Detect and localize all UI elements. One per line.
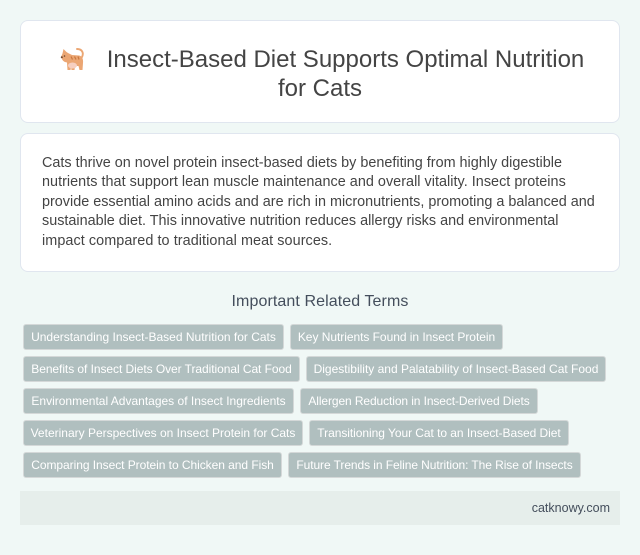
- title text: Insect-Based Diet Supports Optimal Nutrition: [107, 46, 584, 73]
- tag list: [23, 324, 606, 478]
- footer bar: catknowy.com: [532, 501, 610, 515]
- tag list: Allergen Reduction in Insect-Derived Diets: [308, 394, 530, 408]
- description text: [42, 155, 595, 249]
- title card: [20, 20, 620, 123]
- description text: nutrients that support lean muscle maintenance and overall vitality. Insect proteins: [42, 174, 566, 190]
- icon: cat: [60, 48, 84, 70]
- tag list: Veterinary Perspectives on Insect Protein for Cats: [31, 426, 295, 440]
- tag list: Understanding Insect-Based Nutrition for Cats: [31, 330, 276, 344]
- title text: [107, 46, 584, 102]
- tag list: Digestibility and Palatability of Insect-Based Cat Food: [314, 362, 598, 376]
- description text: impact compared to traditional meat sources.: [42, 233, 332, 249]
- title text: for Cats: [278, 75, 362, 102]
- tag list: Future Trends in Feline Nutrition: The Rise of Insects: [296, 458, 573, 472]
- tag list: Environmental Advantages of Insect Ingredients: [31, 394, 286, 408]
- description text: sustainable diet. This innovative nutrition reduces allergy risks and environmental: [42, 213, 558, 229]
- tag list: Comparing Insect Protein to Chicken and Fish: [31, 458, 274, 472]
- tag list: Transitioning Your Cat to an Insect-Based Diet: [317, 426, 561, 440]
- description text: Cats thrive on novel protein insect-based diets by benefiting from highly digestible: [42, 155, 562, 171]
- description card: [20, 133, 620, 272]
- tag list: Key Nutrients Found in Insect Protein: [298, 330, 495, 344]
- tag list: Benefits of Insect Diets Over Traditional Cat Food: [31, 362, 292, 376]
- description text: provide essential amino acids and are rich in micronutrients, promoting a balanced and: [42, 194, 595, 210]
- footer bar: [20, 491, 620, 525]
- heading: related terms: Important Related Terms: [232, 293, 408, 310]
